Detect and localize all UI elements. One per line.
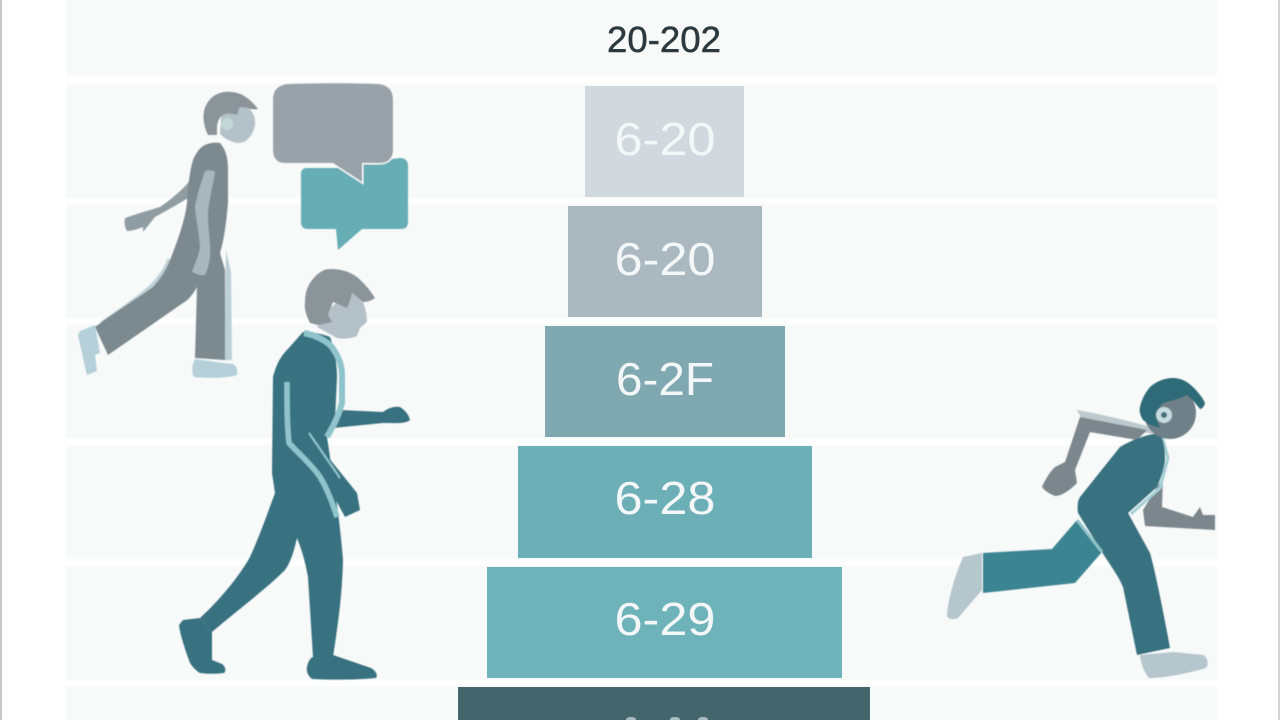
- grey speech bubble: [273, 83, 393, 182]
- pyramid tier 5: 6-29: [614, 593, 716, 645]
- pyramid tier 1: [585, 86, 744, 197]
- pyramid tier 6: [458, 687, 870, 720]
- icon: grey walking person: [78, 92, 258, 378]
- pyramid tier 5: [487, 567, 842, 678]
- teal speech bubble: [301, 158, 408, 250]
- pyramid tier 4: [518, 446, 812, 558]
- icon: teal walking person: [179, 269, 410, 680]
- pyramid tier 2: [568, 206, 762, 317]
- pyramid tier 3: [545, 326, 785, 437]
- icon: running person: [947, 378, 1215, 678]
- pyramid tier 4: 6-28: [614, 472, 716, 524]
- title: year range: 20-202: [607, 19, 721, 60]
- pyramid tier 3: 6-2F: [616, 353, 714, 405]
- pyramid tier 1: 6-20: [614, 113, 716, 165]
- pyramid tier 2: 6-20: [614, 233, 716, 285]
- pyramid chart: [458, 86, 870, 720]
- icon: speech bubbles: [273, 83, 408, 250]
